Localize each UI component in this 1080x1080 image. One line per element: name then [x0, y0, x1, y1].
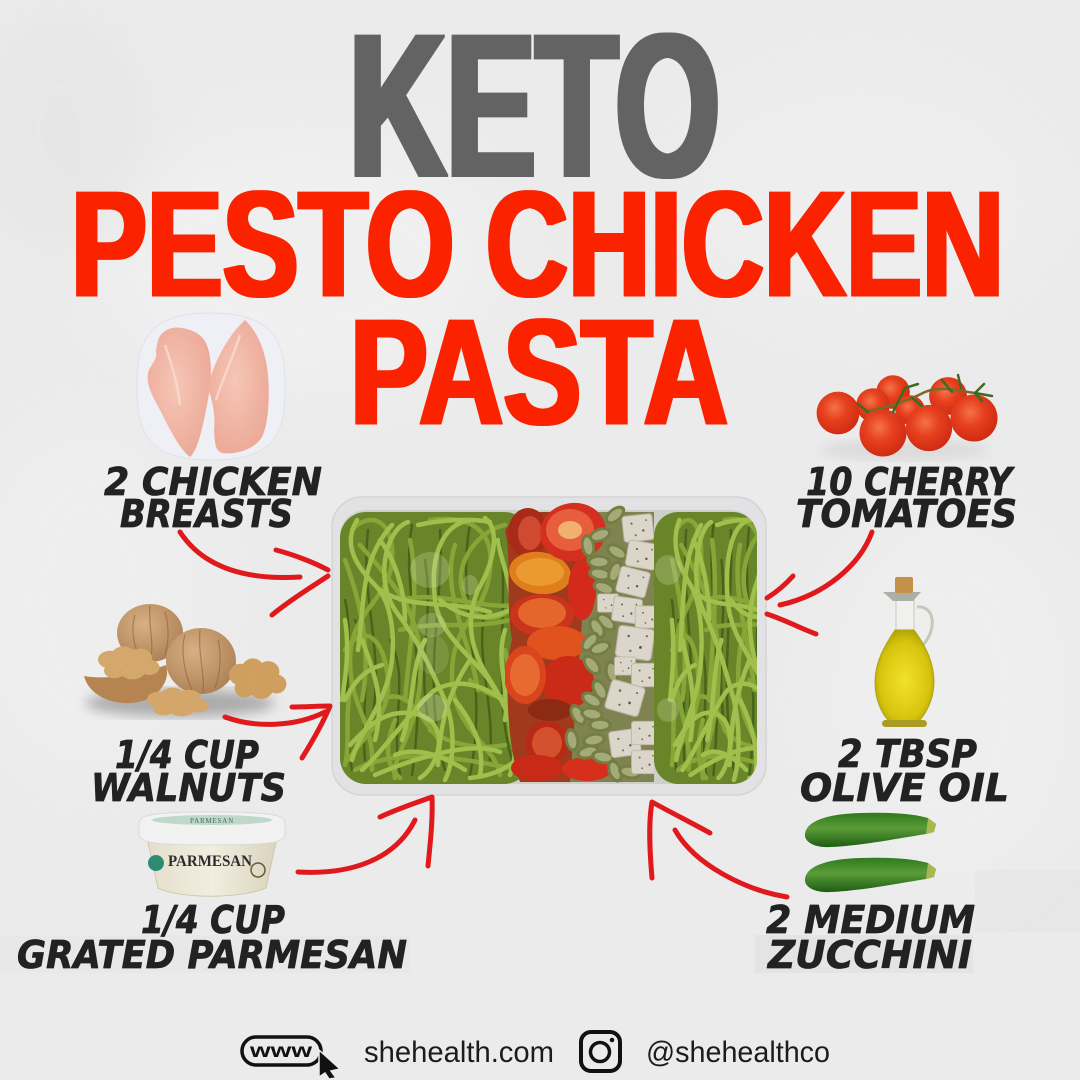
chicken cubes — [598, 514, 661, 774]
arrow: tomatoes to container — [767, 532, 872, 634]
label: 2 medium zucchini: 2 MEDIUM — [766, 898, 975, 942]
container tray — [332, 497, 766, 795]
icon: zucchini — [805, 813, 936, 892]
label: 2 tbsp olive oil: 2 TBSP — [838, 732, 977, 776]
icon: parmesan tub: PARMESAN — [190, 817, 234, 825]
arrow: parmesan to container — [298, 797, 432, 872]
title line: PASTA: PASTA — [350, 287, 728, 456]
label: 10 cherry tomatoes — [796, 460, 1017, 536]
pasta left — [340, 512, 530, 784]
label: 10 cherry tomatoes: TOMATOES — [796, 492, 1017, 536]
label: 2 medium zucchini: ZUCCHINI — [767, 933, 972, 977]
background marble texture — [0, 10, 1070, 880]
label: 1/4 cup walnuts: 1/4 CUP — [115, 733, 259, 777]
label: 1/4 cup walnuts: WALNUTS — [91, 766, 286, 810]
website text: shehealth.com — [364, 1036, 554, 1069]
icon: parmesan tub: PARMESAN — [168, 853, 252, 870]
pasta meal prep container — [332, 497, 784, 795]
label: 1/4 cup grated parmesan — [17, 898, 407, 977]
icon: olive oil bottle — [875, 577, 934, 727]
label: 2 tbsp olive oil — [800, 732, 1009, 810]
icon: www cursor: www — [249, 1041, 312, 1062]
label: 1/4 cup grated parmesan: GRATED PARMESAN — [17, 933, 407, 977]
icon: parmesan tub — [139, 812, 285, 896]
label: 2 chicken breasts: BREASTS — [120, 492, 293, 536]
title — [71, 0, 1004, 456]
footer — [242, 1032, 830, 1079]
label: 10 cherry tomatoes: 10 CHERRY — [806, 460, 1015, 504]
icon: instagram — [581, 1032, 620, 1071]
label: 1/4 cup grated parmesan: 1/4 CUP — [141, 898, 285, 942]
arrow: zucchini to container — [650, 802, 787, 897]
icon: walnuts — [84, 604, 286, 717]
icon: cherry tomatoes on vine — [817, 375, 998, 460]
tomatoes, seeds and chicken — [504, 498, 661, 785]
icon: chicken breasts on plate — [137, 313, 285, 460]
icon: www cursor — [242, 1037, 340, 1079]
pumpkin seeds — [563, 502, 643, 785]
label: 1/4 cup walnuts — [91, 733, 286, 810]
label: 2 tbsp olive oil: OLIVE OIL — [800, 766, 1009, 810]
lower background patches — [0, 870, 1080, 973]
arrow: chicken to container — [180, 532, 328, 615]
label: 2 chicken breasts: 2 CHICKEN — [104, 460, 322, 504]
label: 2 medium zucchini — [766, 898, 975, 977]
arrow: walnuts to container — [225, 706, 330, 758]
pasta right — [654, 512, 757, 784]
instagram handle: @shehealthco — [646, 1036, 830, 1069]
label: 2 chicken breasts — [104, 460, 322, 536]
